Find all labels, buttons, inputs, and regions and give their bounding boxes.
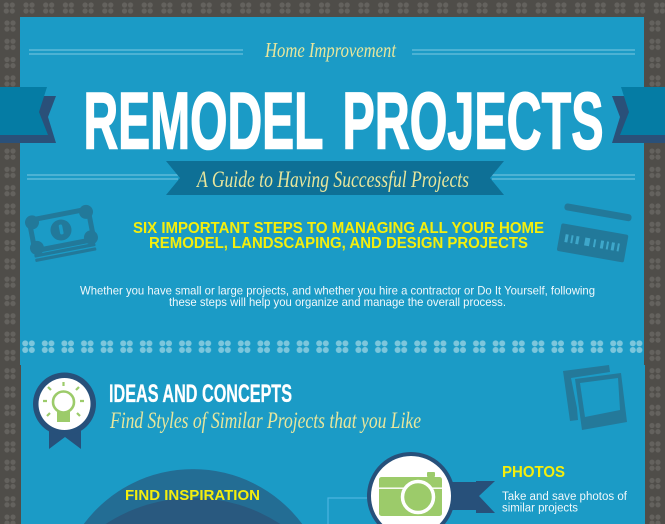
icon: light bulb medal bbox=[33, 372, 96, 449]
ribbon: camera badge bbox=[445, 481, 495, 513]
icon: camera badge bbox=[367, 452, 455, 524]
section heading: Ideas and Concepts: Find Styles of Similar Projects that you Like bbox=[109, 408, 421, 433]
photos text block: PHOTOS bbox=[502, 464, 565, 481]
section heading: Ideas and Concepts bbox=[109, 380, 421, 433]
dotted divider bbox=[22, 340, 644, 354]
connector line bbox=[328, 498, 368, 524]
icon: photo frames bbox=[563, 365, 627, 430]
intro text bbox=[80, 284, 595, 309]
left ribbon bbox=[0, 87, 56, 143]
photos text block bbox=[502, 464, 628, 514]
icon: credit card bbox=[557, 203, 632, 263]
kicker with rules: Home Improvement bbox=[29, 38, 635, 62]
icon: money stack bbox=[24, 204, 100, 263]
yellow heading: SIX IMPORTANT STEPS TO MANAGING ALL YOUR HOME bbox=[133, 220, 544, 237]
right ribbon bbox=[612, 87, 665, 143]
section heading: Ideas and Concepts: IDEAS AND CONCEPTS bbox=[109, 380, 292, 408]
title: REMODEL bbox=[84, 76, 324, 166]
intro text: these steps will help you organize and manage the overall process. bbox=[169, 295, 506, 309]
concentric circles: Find Inspiration bbox=[84, 469, 302, 524]
photos text block: similar projects bbox=[502, 502, 578, 514]
intro text: Whether you have small or large projects, and whether you hire a contractor or Do It Yourself, following bbox=[80, 284, 595, 298]
subtitle banner: A Guide to Having Successful Projects bbox=[195, 167, 469, 192]
kicker with rules: Home Improvement: Home Improvement bbox=[264, 38, 397, 62]
concentric circles: Find Inspiration: FIND INSPIRATION bbox=[125, 487, 260, 504]
yellow heading bbox=[133, 220, 544, 252]
subtitle banner bbox=[27, 161, 635, 195]
yellow heading: REMODEL, LANDSCAPING, AND DESIGN PROJECTS bbox=[149, 235, 528, 252]
photos text block: Take and save photos of bbox=[502, 491, 628, 503]
